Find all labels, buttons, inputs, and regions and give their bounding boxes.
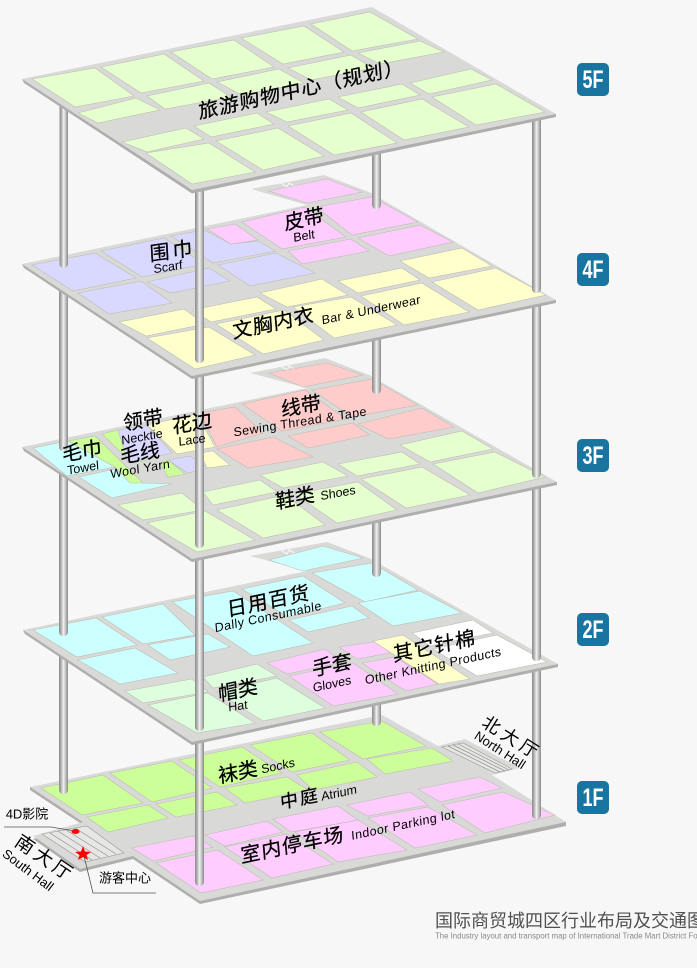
callout: visitor centre: 游客中心 (99, 870, 151, 886)
label: 袜类: 袜类 (217, 757, 259, 788)
floor 2F (23, 465, 558, 745)
label: 线带: 线带 (280, 392, 322, 421)
5F plate (22, 7, 556, 194)
label: Necktie: Necktie (121, 426, 163, 448)
label: Lace: Lace (178, 431, 206, 449)
label: 中庭: 中庭 (279, 785, 319, 813)
label: Scarf: Scarf (153, 258, 183, 276)
3F shops: necktie (lavender) (118, 425, 208, 473)
label: 毛线: 毛线 (119, 439, 161, 468)
3F shops: lace (yellow) (147, 414, 230, 468)
3F plate (22, 358, 557, 562)
label: Wool Yarn: Wool Yarn (110, 457, 170, 481)
4F shops: scarf (lavender) (32, 230, 315, 314)
floor badge 2F (577, 613, 609, 646)
1F shops: socks (green) (41, 721, 453, 832)
label: Sewing Thread & Tape: Sewing Thread & Tape (233, 405, 367, 439)
label: Shoes: Shoes (320, 483, 356, 503)
floor 1F (0, 650, 566, 904)
floor 4F (22, 98, 556, 379)
4F plate (22, 175, 556, 379)
4F shops: bra and underwear (yellow) (119, 248, 546, 369)
label: Socks: Socks (261, 755, 295, 777)
label: 帽类: 帽类 (217, 675, 259, 706)
floor badge 3F: 3F (582, 442, 604, 470)
label: South Hall: South Hall (0, 846, 57, 894)
poles standing on 1F (59, 650, 541, 886)
poles standing on 2F (59, 465, 541, 731)
poles standing on 4F (60, 98, 541, 363)
label: Atrium: Atrium (321, 782, 357, 804)
label: Other Knitting Products: Other Knitting Products (364, 645, 502, 687)
3F shops: shoes (pale green) (118, 431, 545, 552)
floor 5F (22, 7, 556, 194)
label: North Hall: North Hall (472, 728, 528, 772)
3F shops: wool yarn (green) (68, 430, 185, 483)
label: 旅游购物中心（规划）: 旅游购物中心（规划） (198, 55, 404, 124)
callout: visitor centre (75, 846, 156, 893)
floor badge 3F (577, 439, 609, 472)
label: 手套: 手套 (311, 650, 353, 681)
1F shops: indoor parking (pink) (132, 777, 555, 893)
floor badge 4F (577, 253, 609, 286)
label: 皮带: 皮带 (283, 204, 325, 235)
label: Bar & Underwear: Bar & Underwear (321, 293, 421, 327)
floor badge 5F: 5F (582, 66, 604, 94)
label: Gloves: Gloves (312, 673, 352, 695)
label: 花边: 花边 (171, 409, 213, 438)
floor badge 1F (577, 781, 609, 814)
floor badge 4F: 4F (582, 256, 604, 284)
callout: 4D cinema: 4D影院 (6, 806, 48, 822)
label: 围巾: 围巾 (149, 237, 193, 266)
2F shops: gloves (pink) (267, 641, 438, 706)
title: 国际商贸城四区行业布局及交通图 (435, 911, 697, 931)
label: 南大厅: 南大厅 (11, 831, 76, 885)
label: Towel: Towel (67, 458, 99, 478)
5F shops: tourist shopping centre (pale green) (32, 12, 545, 184)
3F shops: towel (cyan) (33, 441, 172, 498)
floor badge 5F (577, 63, 609, 96)
north hall stairs (442, 743, 512, 773)
subtitle: The Industry layout and transport map of International Trade Mart District Four (435, 932, 697, 940)
label: Belt: Belt (293, 227, 316, 245)
3F shops: sewing thread and tape (salmon) (200, 363, 454, 468)
label: 毛巾: 毛巾 (61, 437, 103, 466)
floor 3F (22, 282, 557, 562)
label: 日用百货: 日用百货 (226, 581, 310, 622)
4F shops: belt (pink) (207, 179, 453, 264)
floor badge 1F: 1F (582, 784, 604, 812)
label: 北大厅: 北大厅 (478, 712, 542, 762)
south hall stairs (42, 826, 124, 862)
floor badge 2F: 2F (582, 616, 604, 644)
label: 其它针棉: 其它针棉 (392, 626, 476, 667)
label: 领带: 领带 (122, 406, 164, 435)
1F plate (30, 715, 566, 904)
label: Dally Consumable: Dally Consumable (214, 599, 322, 635)
label: 文胸内衣: 文胸内衣 (232, 304, 314, 344)
label: Indoor Parking lot: Indoor Parking lot (351, 807, 456, 843)
callout: 4D cinema (4, 806, 80, 834)
poles standing on 3F (59, 282, 541, 548)
label: Hat: Hat (228, 698, 249, 714)
2F plate (23, 542, 558, 745)
2F shops: other knitting products (yellow and white) (373, 620, 547, 684)
2F shops: daily consumable (cyan) (33, 546, 462, 684)
label: 室内停车场: 室内停车场 (240, 823, 344, 868)
2F shops: hat (pale green) (125, 664, 325, 733)
label: 鞋类: 鞋类 (274, 483, 316, 514)
